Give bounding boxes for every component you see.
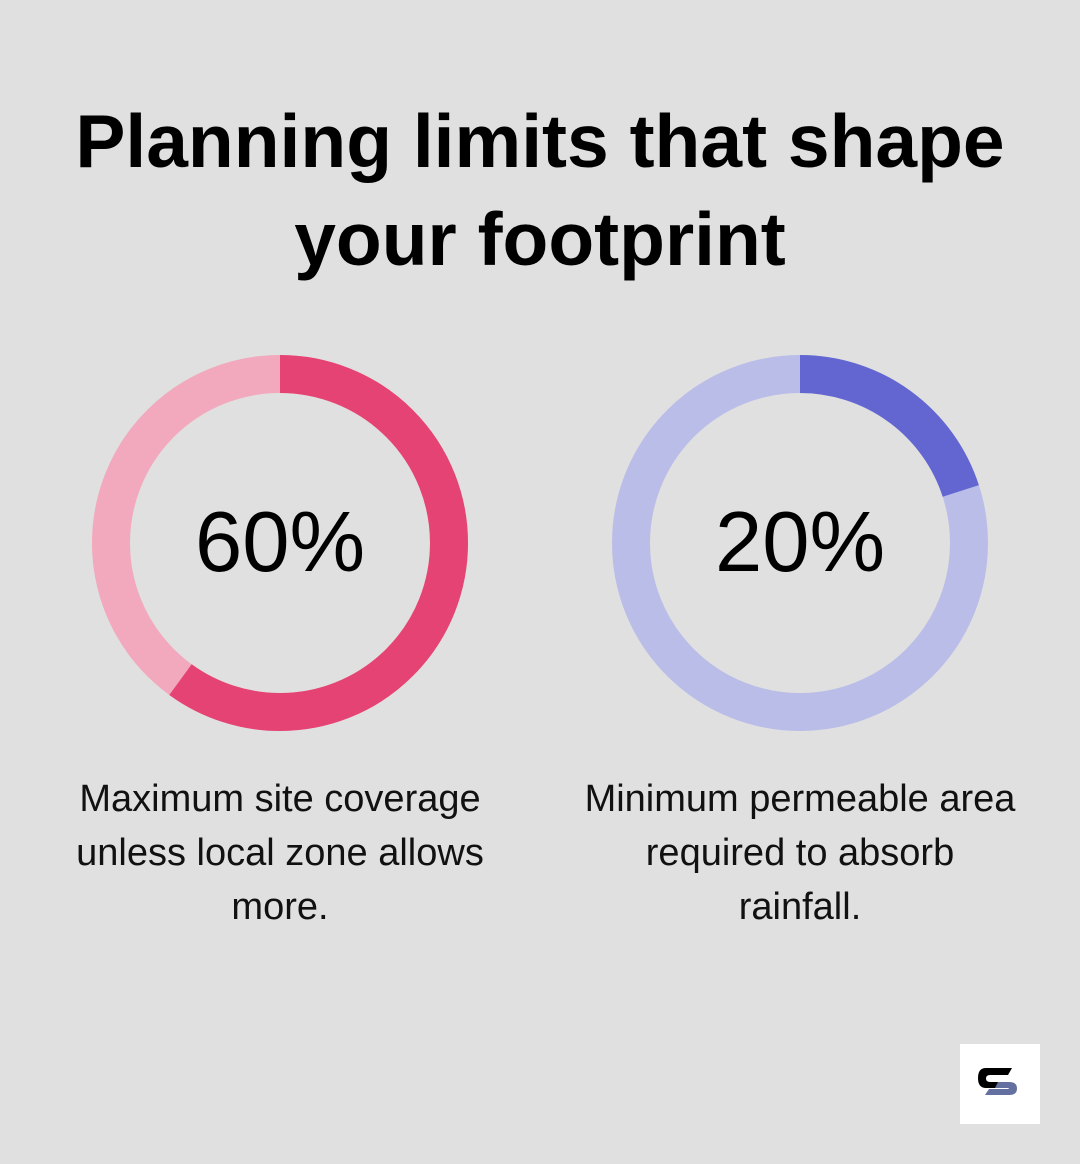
donut chart: 20% xyxy=(612,355,988,731)
caption left: more. xyxy=(231,886,329,928)
donut chart: 60% xyxy=(92,355,468,731)
caption right: Minimum permeable area xyxy=(585,778,1015,820)
logo xyxy=(960,1044,1040,1124)
caption left: unless local zone allows xyxy=(76,832,484,874)
title xyxy=(75,99,1005,281)
caption right: required to absorb xyxy=(646,832,954,874)
stat: 20%: 20% xyxy=(715,495,885,590)
caption left: Maximum site coverage xyxy=(79,778,481,820)
title: your footprint xyxy=(294,197,786,281)
caption right xyxy=(585,778,1016,928)
caption right: rainfall. xyxy=(739,886,861,928)
stat: 60%: 60% xyxy=(195,495,365,590)
caption left xyxy=(76,778,484,928)
title: Planning limits that shape xyxy=(75,99,1005,183)
